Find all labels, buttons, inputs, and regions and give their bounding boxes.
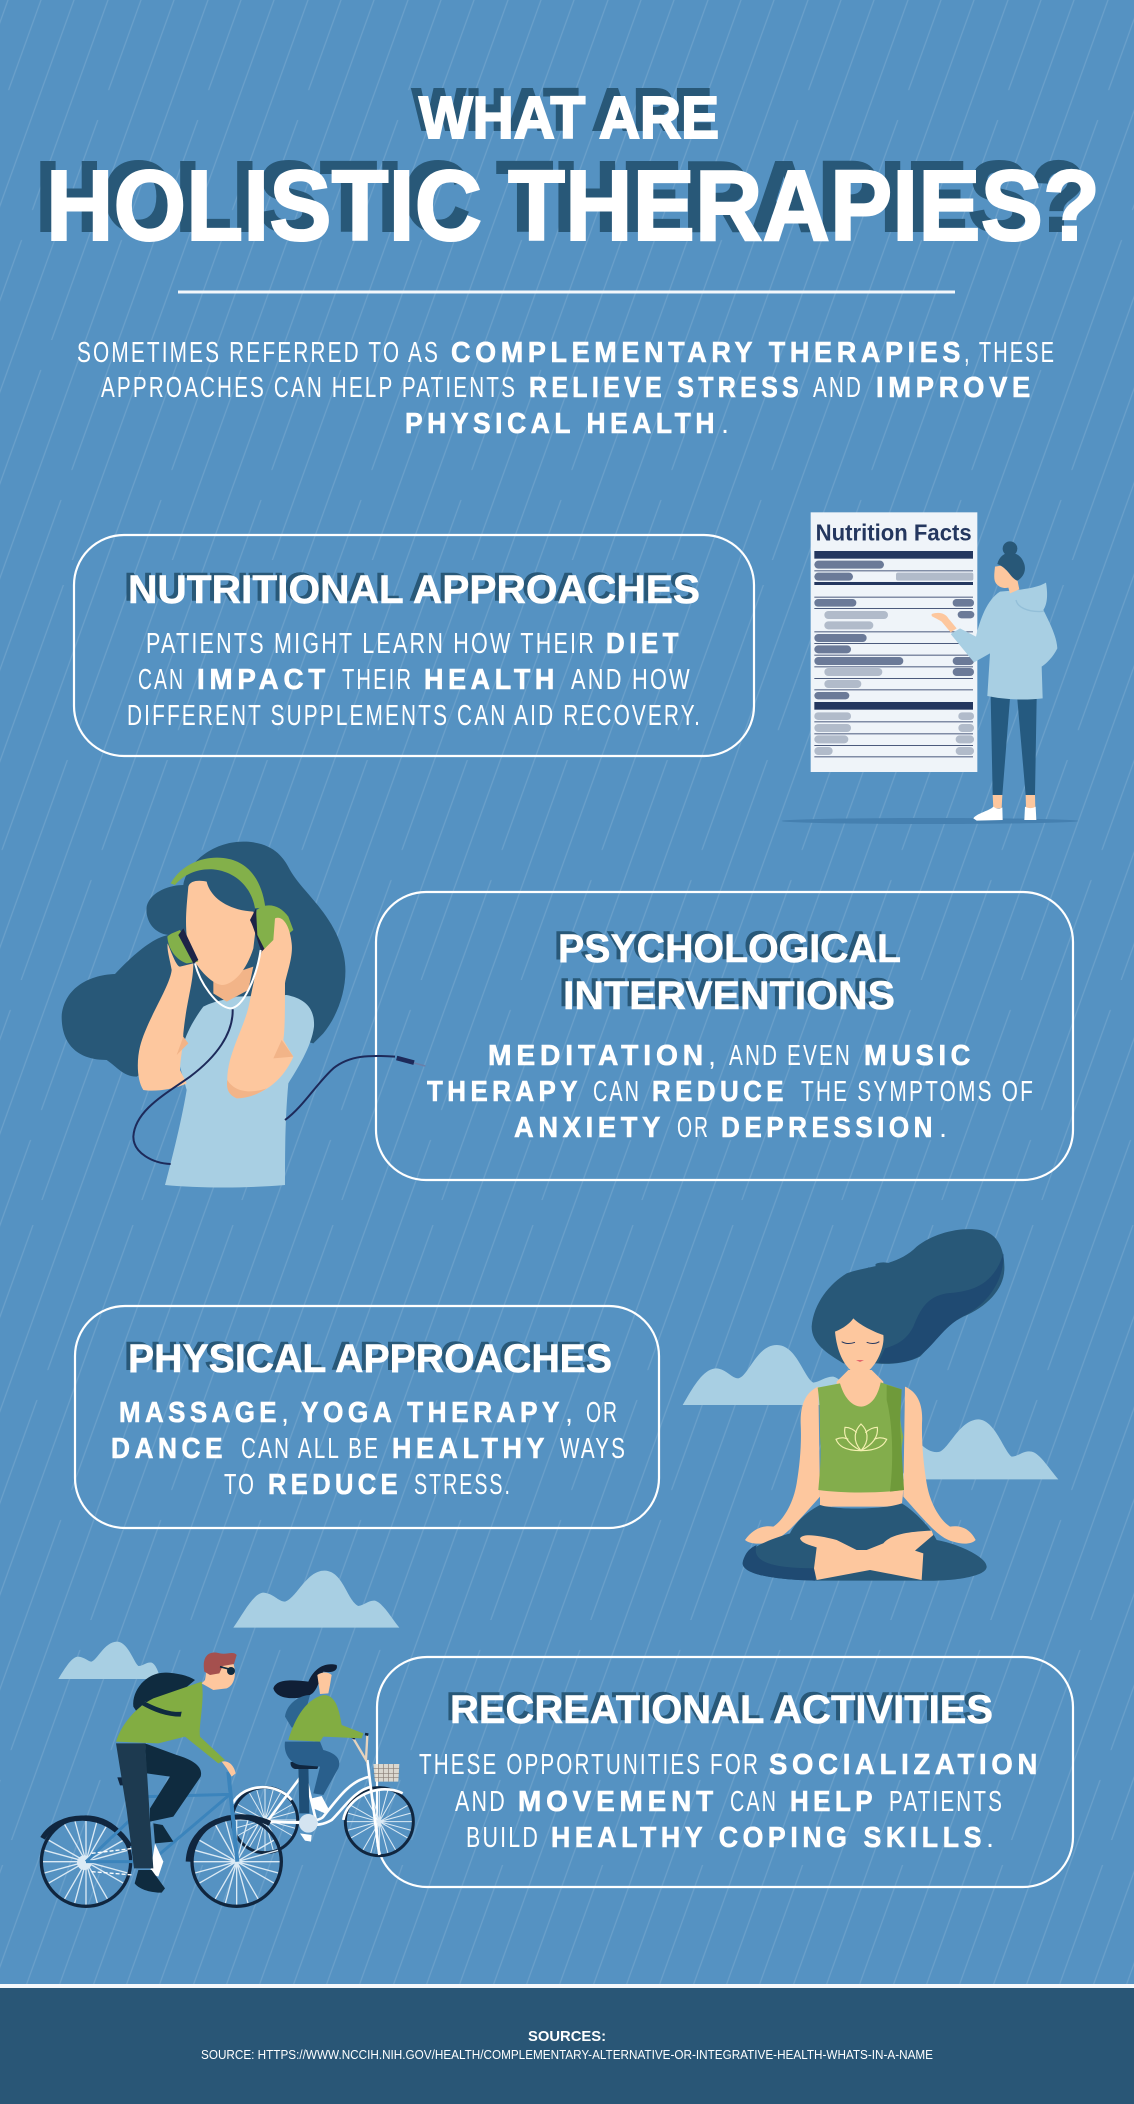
nutrition label: Nutrition Facts: [816, 520, 972, 546]
body text: psychological interventions: ,: [708, 1040, 719, 1072]
legs: [743, 1503, 987, 1581]
intro text: , THESE: [964, 337, 1056, 369]
intro text: RELIEVE STRESS: [529, 372, 803, 404]
source url: SOURCE: HTTPS://WWW.NCCIH.NIH.GOV/HEALTH/COMPLEMENTARY-ALTERNATIVE-OR-INTEGRATIVE-HEALTH-WHATS-IN-A-NAME: [201, 2047, 933, 2062]
body text: nutritional approaches: DIFFERENT SUPPLEMENTS CAN AID RECOVERY.: [127, 700, 702, 732]
audio cable: [133, 1009, 425, 1164]
body text: recreational activities: [419, 1749, 1042, 1854]
panel: nutritional approaches: [74, 535, 754, 756]
body text: psychological interventions: ANXIETY: [514, 1112, 665, 1144]
body text: recreational activities: HELP: [790, 1786, 877, 1818]
intro text: PHYSICAL HEALTH: [405, 408, 719, 440]
body text: nutritional approaches: THEIR: [342, 664, 413, 696]
woman cyclist: [273, 1664, 363, 1842]
heading: psychological interventions: [554, 924, 901, 1018]
body text: physical approaches: YOGA THERAPY: [301, 1397, 564, 1429]
body text: recreational activities: .: [986, 1822, 997, 1854]
title: [35, 77, 1100, 262]
body text: psychological interventions: THE SYMPTOMS OF: [801, 1076, 1035, 1108]
heading: recreational activities: RECREATIONAL ACTIVITIES: [446, 1685, 989, 1729]
body text: psychological interventions: MUSIC: [864, 1040, 975, 1072]
heading: psychological interventions: PSYCHOLOGICAL: [558, 927, 901, 971]
body text: physical approaches: STRESS.: [414, 1469, 512, 1501]
body text: physical approaches: HEALTHY: [392, 1433, 549, 1465]
body text: psychological interventions: REDUCE: [652, 1076, 788, 1108]
body text: psychological interventions: OR: [677, 1112, 710, 1144]
body text: recreational activities: AND: [455, 1786, 507, 1818]
intro text: APPROACHES CAN HELP PATIENTS: [101, 372, 517, 404]
body text: recreational activities: MOVEMENT: [518, 1786, 718, 1818]
panel: psychological interventions: [376, 892, 1073, 1180]
body text: physical approaches: OR: [586, 1397, 619, 1429]
sources heading: SOURCES:: [528, 2028, 606, 2045]
body text: psychological interventions: MEDITATION: [488, 1040, 708, 1072]
nutrition label: [811, 512, 977, 772]
heading: nutritional approaches: NUTRITIONAL APPROACHES: [128, 568, 700, 612]
body text: recreational activities: SOCIALIZATION: [769, 1749, 1042, 1781]
clouds: [683, 1345, 1058, 1479]
body text: recreational activities: HEALTHY COPING SKILLS: [551, 1822, 986, 1854]
body text: physical approaches: DANCE: [111, 1433, 227, 1465]
panel: physical approaches: [75, 1306, 659, 1528]
intro text: .: [721, 408, 732, 440]
illustration: woman reading nutrition facts: [782, 512, 1078, 824]
illustration: woman meditating with clouds: [683, 1229, 1058, 1581]
body text: physical approaches: [111, 1397, 627, 1501]
body text: psychological interventions: [427, 1040, 1035, 1144]
heading: recreational activities: RECREATIONAL ACTIVITIES: [450, 1688, 993, 1732]
body text: physical approaches: TO: [224, 1469, 256, 1501]
body text: psychological interventions: AND EVEN: [729, 1040, 852, 1072]
panel: recreational activities: [377, 1657, 1073, 1887]
body text: physical approaches: ,: [565, 1397, 576, 1429]
basket: [373, 1764, 399, 1782]
title: WHAT ARE: [412, 77, 712, 143]
body text: physical approaches: WAYS: [560, 1433, 627, 1465]
man's blue bicycle: [41, 1772, 281, 1906]
body text: psychological interventions: CAN: [593, 1076, 641, 1108]
intro text: IMPROVE: [876, 372, 1035, 404]
heading: physical approaches: PHYSICAL APPROACHES: [124, 1334, 608, 1378]
body text: psychological interventions: DEPRESSION: [721, 1112, 937, 1144]
person: [932, 541, 1057, 821]
body text: physical approaches: REDUCE: [268, 1469, 402, 1501]
body text: physical approaches: MASSAGE: [119, 1397, 281, 1429]
intro text: [77, 337, 1056, 440]
intro text: COMPLEMENTARY THERAPIES: [451, 337, 965, 369]
hair: [812, 1229, 1004, 1364]
skin: arms, torso, face: [745, 1318, 976, 1544]
title: WHAT ARE: [419, 85, 719, 151]
body text: nutritional approaches: [127, 628, 702, 732]
body text: nutritional approaches: HEALTH: [424, 664, 559, 696]
green top with lotus: [818, 1382, 904, 1492]
body text: psychological interventions: THERAPY: [427, 1076, 582, 1108]
heading: physical approaches: PHYSICAL APPROACHES: [128, 1337, 612, 1381]
body text: recreational activities: BUILD: [466, 1822, 540, 1854]
body text: psychological interventions: .: [939, 1112, 950, 1144]
body text: recreational activities: PATIENTS: [889, 1786, 1004, 1818]
heading: nutritional approaches: NUTRITIONAL APPROACHES: [124, 566, 696, 610]
title: HOLISTIC THERAPIES?: [35, 141, 1087, 253]
body text: physical approaches: ,: [281, 1397, 292, 1429]
man cyclist: [116, 1652, 237, 1893]
body text: physical approaches: CAN ALL BE: [241, 1433, 380, 1465]
footer: [0, 1984, 1134, 2104]
body text: nutritional approaches: DIET: [606, 628, 683, 660]
intro text: AND: [813, 372, 863, 404]
body text: recreational activities: THESE OPPORTUNITIES FOR: [419, 1749, 760, 1781]
heading: psychological interventions: INTERVENTIONS: [563, 974, 895, 1018]
body text: recreational activities: CAN: [730, 1786, 778, 1818]
illustration: two cyclists with clouds: [41, 1571, 413, 1906]
headphones: [167, 858, 293, 963]
intro text: SOMETIMES REFERRED TO AS: [77, 337, 440, 369]
heading: psychological interventions: PSYCHOLOGICAL: [554, 924, 897, 968]
body text: nutritional approaches: PATIENTS MIGHT LEARN HOW THEIR: [146, 628, 596, 660]
body text: nutritional approaches: AND HOW: [571, 664, 692, 696]
clouds: [58, 1571, 399, 1679]
body text: nutritional approaches: CAN: [138, 664, 185, 696]
body text: nutritional approaches: IMPACT: [197, 664, 330, 696]
heading: psychological interventions: INTERVENTIONS: [559, 971, 891, 1015]
illustration: woman with headphones: [62, 842, 425, 1187]
woman's white bicycle: [232, 1734, 413, 1856]
